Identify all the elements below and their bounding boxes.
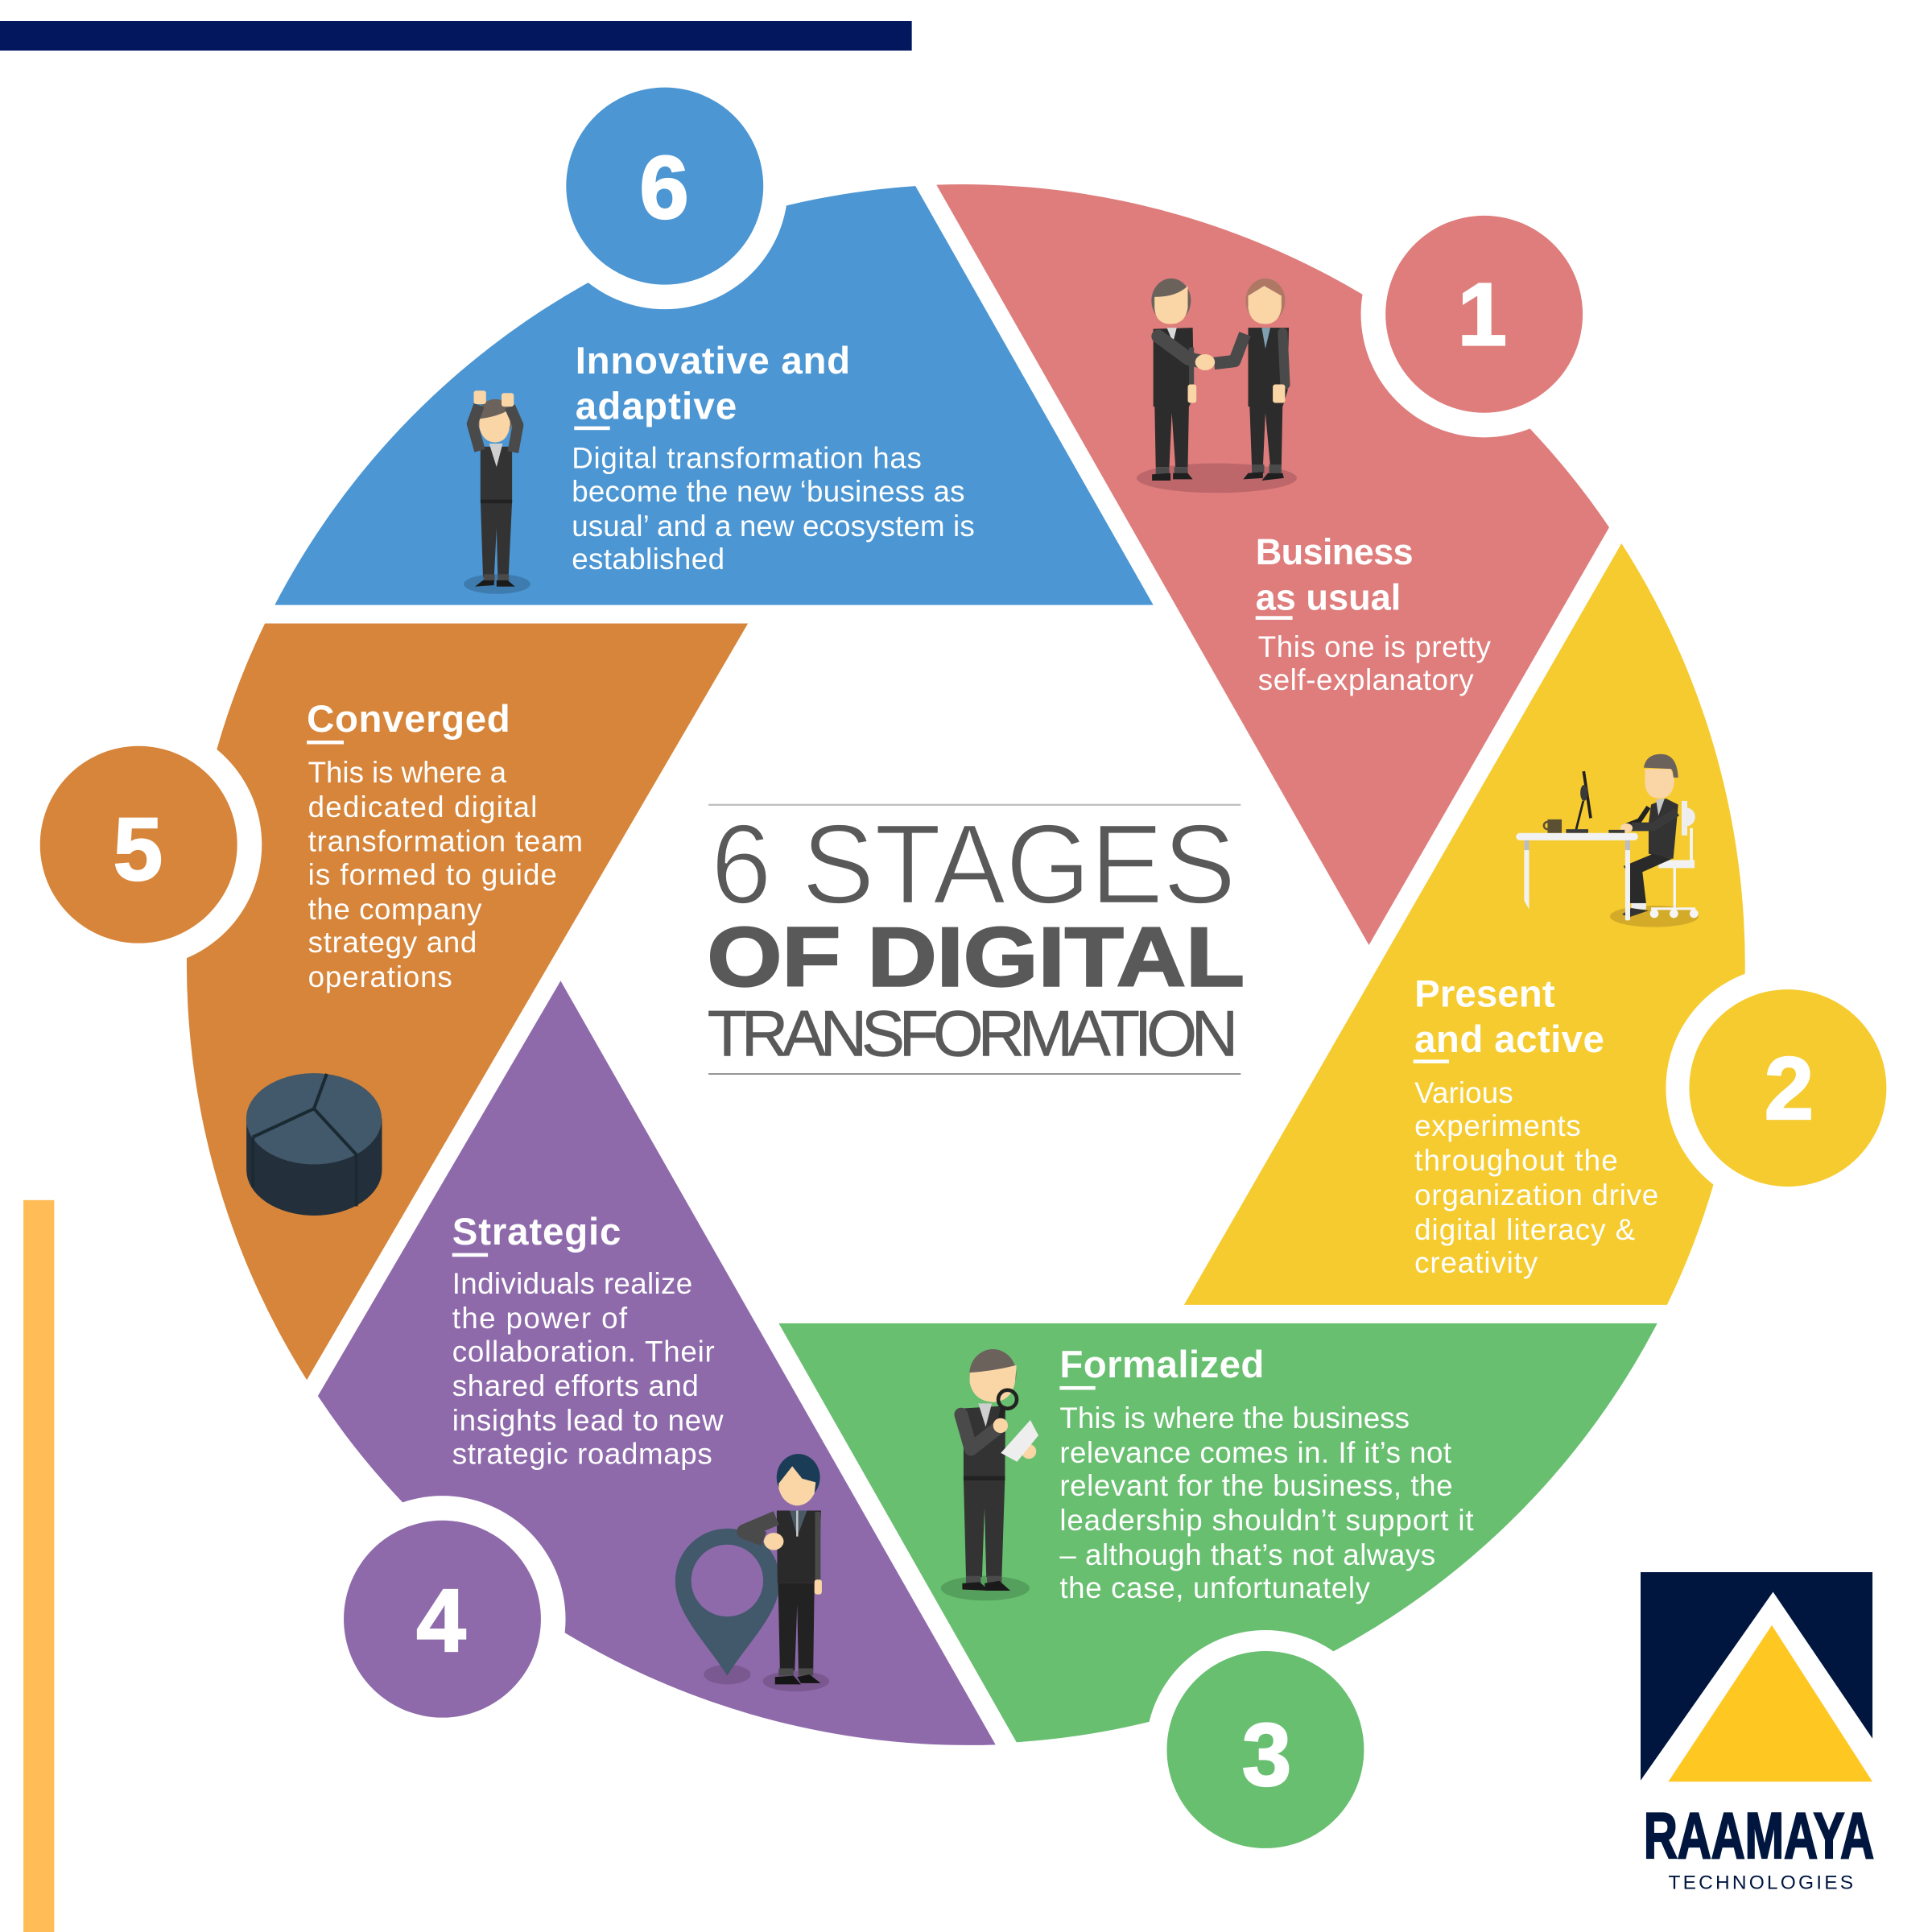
text: stage 5 description: This is where a <box>308 756 507 789</box>
panel: stage 5 converged <box>15 623 748 1380</box>
panel: stage 2 present and active <box>1184 543 1909 1305</box>
text: stage 3 description: relevant for the business, the <box>1059 1469 1453 1502</box>
badge 3 <box>1146 1630 1385 1869</box>
text: stage 2 description: creativity <box>1414 1246 1538 1279</box>
text: stage 4 description: shared efforts and <box>452 1369 699 1402</box>
text: stage 3 description: This is where the business <box>1059 1402 1410 1435</box>
text: stage 1 description: self-explanatory <box>1258 663 1474 696</box>
text: stage 5 description: strategy and <box>308 926 477 959</box>
icon: man leaning on map pin <box>675 1454 829 1691</box>
text: stage 6 description: established <box>572 543 724 576</box>
icon: man with raised arms <box>464 390 530 594</box>
left amber bar <box>23 1200 54 1932</box>
text: stage 3 description <box>1059 1402 1474 1604</box>
badge 3: 3 <box>1242 1706 1291 1805</box>
text: stage 4 description: collaboration. Their <box>452 1335 715 1368</box>
segment 1 <box>936 184 1609 945</box>
title: 6 Stages of Digital Transformation: 6 STAGES <box>711 801 1236 927</box>
badge 1 <box>1361 191 1608 437</box>
text: stage 4 description: insights lead to new <box>452 1404 724 1437</box>
badge 6 <box>542 63 788 309</box>
panel: stage 1 business as usual <box>936 184 1609 945</box>
icon: handshake <box>1137 279 1297 493</box>
text: stage 6 description <box>572 442 975 576</box>
text: stage 4 description: the power of <box>452 1302 628 1335</box>
segment 3 <box>778 1323 1657 1742</box>
text: stage 2 description: digital literacy & <box>1414 1213 1635 1246</box>
badge 5: 5 <box>114 800 163 899</box>
heading: Innovative and adaptive <box>574 340 850 430</box>
text: stage 1 description: This one is pretty <box>1258 630 1492 663</box>
text: stage 2 description: organization drive <box>1414 1179 1658 1212</box>
text: stage 3 description: the case, unfortunately <box>1059 1571 1371 1604</box>
panel: stage 6 innovative and adaptive <box>275 63 1154 605</box>
heading: Present and active: and active <box>1414 1018 1604 1061</box>
heading: Innovative and adaptive: adaptive <box>576 385 737 427</box>
heading: Formalized: Formalized <box>1059 1344 1264 1386</box>
text: stage 1 description <box>1258 630 1492 696</box>
text: stage 2 description: Various <box>1414 1076 1513 1109</box>
text: stage 2 description <box>1414 1076 1658 1279</box>
text: stage 6 description: Digital transformation has <box>572 442 922 475</box>
heading: Business as usual: as usual <box>1256 577 1401 618</box>
title: 6 Stages of Digital Transformation: OF DIGITAL <box>708 910 1245 1004</box>
badge 6: 6 <box>639 138 689 237</box>
badge 2: 2 <box>1765 1039 1814 1138</box>
segment 2 <box>1184 543 1745 1305</box>
heading: Business as usual <box>1256 531 1414 620</box>
segment 6 <box>275 186 1154 605</box>
heading: Present and active <box>1414 973 1604 1063</box>
heading: Converged: Converged <box>307 698 510 741</box>
heading: Business as usual: Business <box>1256 531 1414 572</box>
text: stage 5 description: transformation team <box>308 825 583 858</box>
top navy bar <box>0 21 912 51</box>
text: stage 5 description: operations <box>308 960 452 993</box>
text: stage 4 description: strategic roadmaps <box>452 1437 712 1470</box>
text: stage 2 description: throughout the <box>1414 1144 1618 1177</box>
text: stage 5 description <box>308 756 583 993</box>
badge 1: 1 <box>1458 266 1507 365</box>
text: stage 5 description: dedicated digital <box>308 791 537 824</box>
badge 4 <box>319 1496 566 1742</box>
badge 5 <box>15 721 262 968</box>
badge 2 <box>1666 966 1909 1210</box>
logo tagline: TECHNOLOGIES <box>1668 1872 1853 1893</box>
logo: Raamaya Technologies <box>1641 1572 1874 1893</box>
text: stage 4 description: Individuals realize <box>452 1267 692 1300</box>
panel: stage 3 formalized <box>778 1323 1657 1869</box>
segment 4 <box>318 980 996 1745</box>
panel: stage 4 strategic <box>318 980 996 1745</box>
text: stage 6 description: become the new ‘business as <box>572 475 964 508</box>
logo mark <box>1641 1572 1872 1781</box>
text: stage 5 description: the company <box>308 893 482 926</box>
text: stage 3 description: – although that’s not always <box>1059 1538 1435 1571</box>
heading: Strategic: Strategic <box>452 1211 621 1253</box>
text: stage 3 description: leadership shouldn’t support it <box>1059 1504 1474 1537</box>
text: stage 3 description: relevance comes in. If it’s not <box>1059 1436 1451 1469</box>
text: stage 4 description <box>452 1267 724 1470</box>
title: 6 Stages of Digital Transformation <box>708 801 1245 1075</box>
text: stage 6 description: usual’ and a new ecosystem is <box>572 510 975 543</box>
segment 5 <box>187 623 748 1380</box>
heading: Present and active: Present <box>1414 973 1555 1016</box>
icon: man at desk <box>1516 754 1699 927</box>
text: stage 2 description: experiments <box>1414 1109 1581 1142</box>
icon: 3D pie chart <box>246 1073 382 1216</box>
text: stage 5 description: is formed to guide <box>308 858 557 891</box>
badge 4: 4 <box>416 1571 466 1670</box>
heading: Innovative and adaptive: Innovative and <box>576 340 850 382</box>
title: 6 Stages of Digital Transformation: TRANSFORMATION <box>708 998 1238 1071</box>
icon: man with magnifier <box>941 1349 1038 1600</box>
